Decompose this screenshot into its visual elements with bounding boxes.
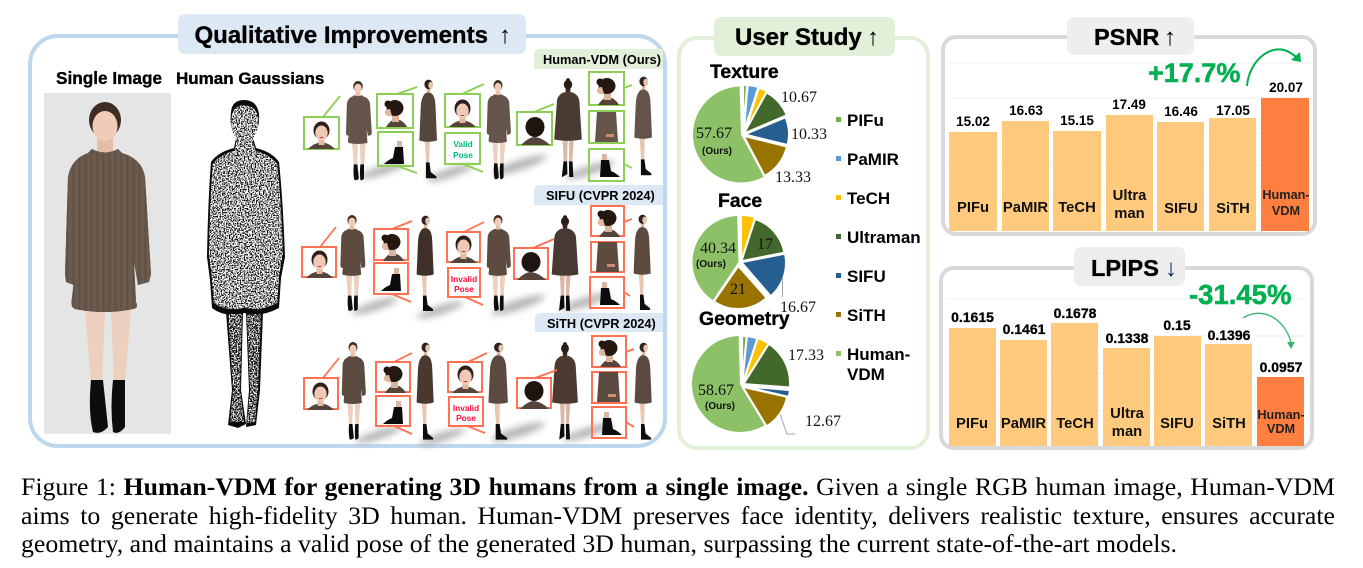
pie chart: geometry	[698, 330, 841, 434]
bar labels: psnr	[957, 188, 1310, 222]
legend: TeCH	[847, 189, 890, 208]
tag: invalid pose: Pose	[456, 413, 476, 423]
arrow: lpips reduction	[1243, 313, 1295, 349]
bar labels: lpips: VDM	[1267, 422, 1295, 436]
method label: sith: SiTH (CVPR 2024)	[547, 316, 656, 331]
pie values: geometry	[698, 347, 841, 430]
pie values: texture: 10.67	[781, 89, 817, 106]
pie values: face: 40.34	[700, 240, 736, 257]
pie values: geometry: 12.67	[805, 413, 841, 430]
bar labels: lpips: PaMIR	[1001, 416, 1046, 432]
heading: lpips: ↓	[1165, 255, 1177, 282]
heading: qualitative improvements	[178, 14, 526, 54]
figure caption: Figure 1: Human-VDM for generating 3D humans from a single image. Given a single RGB human image, Human-VDM	[21, 472, 1335, 501]
legend: SIFU	[847, 267, 886, 286]
heading: user study	[714, 17, 895, 56]
bar values: psnr: 17.49	[1112, 97, 1146, 112]
heading: user study: ↑	[867, 24, 879, 51]
heading: psnr: ↑	[1164, 24, 1176, 51]
pie title: geometry: Geometry	[699, 308, 790, 330]
figure caption	[21, 472, 1335, 558]
pie values: geometry: 58.67	[698, 382, 734, 399]
pie values: face: 16.67	[780, 299, 816, 316]
legend: Ultraman	[847, 228, 921, 247]
bars: psnr	[949, 98, 1309, 231]
bar labels: lpips: Human-	[1257, 408, 1305, 422]
heading: qualitative improvements: ↑	[499, 22, 511, 49]
pie chart: face	[696, 209, 816, 316]
bar values: psnr	[956, 80, 1303, 129]
bar values: psnr: 17.05	[1216, 103, 1250, 118]
panel: lpips bar chart	[941, 247, 1312, 448]
pie values: texture: 13.33	[775, 169, 811, 186]
pie values: texture: 57.67	[696, 125, 732, 142]
row: human-vdm renders	[304, 72, 652, 181]
bar values: lpips	[951, 305, 1303, 375]
bar values: psnr: 20.07	[1269, 80, 1303, 95]
method label: human-vdm ours	[534, 49, 663, 69]
tag: invalid pose	[451, 274, 477, 294]
method label: human-vdm ours: Human-VDM (Ours)	[543, 52, 661, 67]
pie values: face	[696, 236, 816, 316]
bars: lpips	[949, 323, 1304, 446]
bar values: psnr: 16.63	[1009, 103, 1043, 118]
bar labels: lpips: SIFU	[1160, 416, 1194, 432]
bar values: psnr: 15.15	[1060, 113, 1094, 128]
bar labels: psnr: PaMIR	[1003, 200, 1048, 216]
bar labels: lpips: PIFu	[956, 416, 988, 432]
pie title: face: Face	[718, 190, 762, 212]
bar values: lpips: 0.1615	[951, 309, 994, 325]
method label: sifu: SIFU (CVPR 2024)	[546, 188, 655, 203]
method label: sifu	[534, 185, 663, 205]
pie values: face: 17	[757, 236, 773, 253]
tag: valid pose	[453, 139, 473, 160]
bar labels: psnr: SiTH	[1216, 201, 1250, 217]
tag: invalid pose: Invalid	[451, 274, 477, 284]
pie values: face: (Ours)	[696, 259, 726, 270]
tag: invalid pose	[453, 403, 479, 423]
pie values: texture: (Ours)	[702, 146, 732, 157]
bar labels: psnr: SIFU	[1164, 201, 1198, 217]
pie chart: texture	[696, 79, 827, 186]
bar labels: lpips	[956, 406, 1305, 440]
legend: SiTH	[847, 306, 886, 325]
bar labels: lpips: man	[1112, 424, 1142, 440]
bar labels: psnr: man	[1114, 206, 1145, 222]
panel: user study	[679, 17, 928, 448]
figure caption: geometry, and maintains a valid pose of the generated 3D human, surpassing the current state-of-the-art models.	[21, 529, 1177, 558]
arrow: psnr gain	[1247, 49, 1301, 86]
pie values: geometry: (Ours)	[705, 401, 735, 412]
pie values: face: 21	[730, 281, 746, 298]
row: sith renders	[304, 336, 652, 440]
legend: VDM	[847, 365, 885, 384]
tag: valid pose: Valid	[453, 139, 473, 149]
legend: PaMIR	[847, 150, 899, 169]
bar labels: lpips: TeCH	[1056, 416, 1094, 432]
bar labels: psnr: TeCH	[1058, 200, 1096, 216]
human gaussian point cloud figure	[207, 100, 285, 428]
pie values: texture: 10.33	[791, 126, 827, 143]
bar labels: psnr: PIFu	[957, 200, 989, 216]
column label: human gaussians: Human Gaussians	[176, 69, 324, 88]
bar values: lpips: 0.15	[1163, 317, 1191, 333]
pie values: texture	[696, 89, 827, 186]
tag: invalid pose: Pose	[454, 284, 474, 294]
heading: lpips	[1074, 247, 1185, 286]
panel: qualitative improvements	[30, 14, 665, 449]
bar values: lpips: 0.0957	[1260, 359, 1303, 375]
bar values: lpips: 0.1461	[1003, 321, 1046, 337]
heading: psnr: PSNR	[1094, 24, 1159, 50]
heading: lpips: LPIPS	[1091, 255, 1159, 281]
legend: Human-	[847, 345, 910, 364]
bar values: psnr: 16.46	[1164, 104, 1198, 119]
heading: qualitative improvements: Qualitative Improvements	[194, 22, 488, 49]
legend: PIFu	[847, 111, 884, 130]
bar labels: psnr: VDM	[1272, 204, 1300, 218]
bar labels: lpips: Ultra	[1110, 406, 1145, 422]
bar labels: lpips: SiTH	[1212, 416, 1246, 432]
input photo: woman in brown dress	[44, 93, 171, 434]
pie values: geometry: 17.33	[788, 347, 824, 364]
bar labels: psnr: Ultra	[1113, 188, 1147, 204]
column label: single image: Single Image	[56, 68, 162, 88]
callout: +17.7%: +17.7%	[1148, 58, 1240, 88]
legend	[836, 111, 921, 384]
tag: invalid pose: Invalid	[453, 403, 479, 413]
bar values: psnr: 15.02	[956, 114, 990, 129]
method label: sith	[535, 313, 663, 332]
bar values: lpips: 0.1338	[1106, 330, 1149, 346]
panel: psnr bar chart	[943, 17, 1315, 234]
leader line: sifu face	[782, 278, 784, 297]
bar values: lpips: 0.1678	[1054, 305, 1097, 321]
bar values: lpips: 0.1396	[1208, 327, 1251, 343]
tag: valid pose: Pose	[453, 150, 473, 160]
pie title: texture: Texture	[710, 61, 779, 83]
heading: psnr	[1067, 17, 1194, 55]
figure caption: aims to generate high-fidelity 3D human. Human-VDM preserves face identity, delivers realistic texture, ensures accurate	[21, 500, 1335, 530]
row: sifu renders	[302, 206, 651, 311]
leader line: sith geometry	[780, 414, 795, 434]
cast shadows under figures	[351, 152, 616, 449]
callout: -31.45%: -31.45%	[1189, 279, 1291, 310]
heading: user study: User Study	[735, 24, 862, 51]
bar labels: psnr: Human-	[1262, 188, 1310, 202]
